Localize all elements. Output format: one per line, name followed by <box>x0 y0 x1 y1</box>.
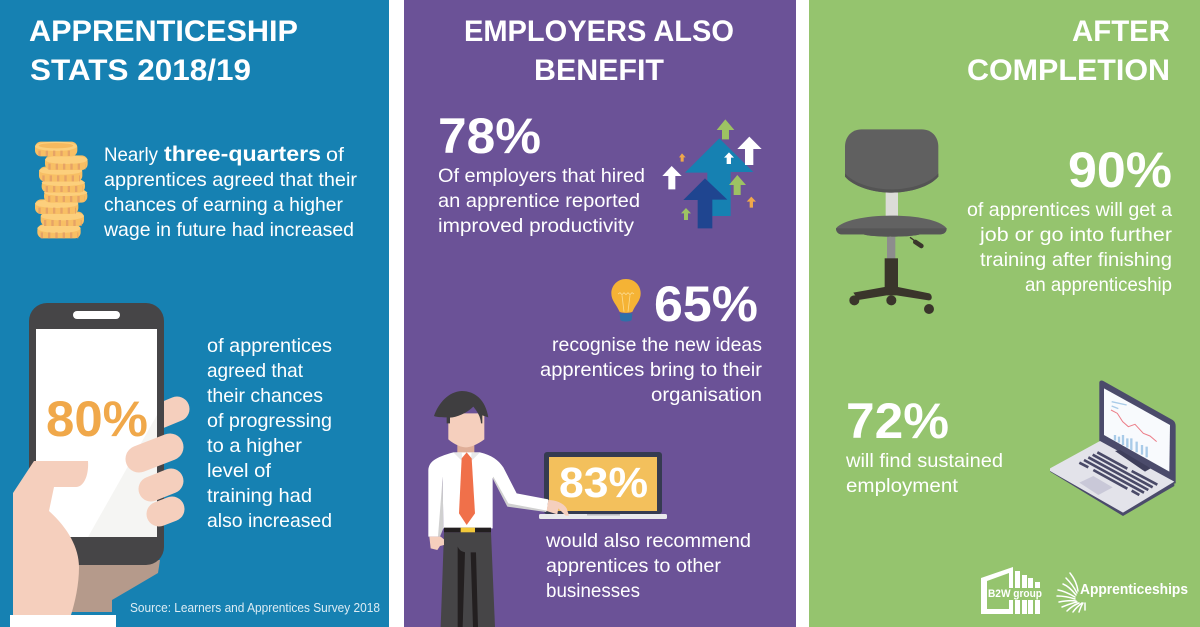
text: 72% description: employment <box>846 475 959 497</box>
text: 80% description: also increased <box>207 510 332 532</box>
text: 78% description: an apprentice reported <box>438 190 640 212</box>
heading: employers also benefit <box>464 15 734 87</box>
logo: Apprenticeships: Apprenticeships <box>1080 581 1188 598</box>
illustration: laptop showing 83% <box>539 452 667 519</box>
icon: office chair <box>836 129 947 314</box>
text: 80% description: agreed that <box>207 360 304 382</box>
icon: stack of coins <box>35 142 88 238</box>
heading: apprenticeship stats 2018/19 <box>29 15 298 87</box>
icon: rising arrows <box>662 119 762 228</box>
text: three-quarters stat: wage in future had increased <box>103 219 354 241</box>
panel: after completion <box>809 0 1200 627</box>
text: three-quarters stat <box>103 143 358 241</box>
text: 65% description: recognise the new ideas <box>552 334 762 356</box>
text: 83% description: businesses <box>546 580 640 602</box>
text: 80% description: to a higher <box>207 435 303 457</box>
text: 78% description: Of employers that hired <box>438 165 645 187</box>
stat: 90%: 90% <box>1068 142 1172 198</box>
text: 83% description: would also recommend <box>545 530 751 552</box>
text: three-quarters stat: apprentices agreed that their <box>104 169 358 191</box>
text: 80% description: their chances <box>207 385 323 407</box>
heading: after completion: AFTER <box>1072 15 1170 48</box>
text: 90% description <box>967 199 1173 296</box>
text: 90% description: training after finishing <box>980 249 1172 271</box>
text: 83% description <box>545 530 751 602</box>
text: 80% description: of apprentices <box>207 335 332 357</box>
text: 90% description: job or go into further <box>979 224 1173 246</box>
text: three-quarters stat: of <box>326 144 345 166</box>
text: three-quarters stat: Nearly <box>104 144 158 166</box>
text: 90% description: of apprentices will get a <box>967 199 1172 221</box>
heading: after completion: COMPLETION <box>967 54 1170 87</box>
text: three-quarters stat: three-quarters <box>164 143 321 166</box>
text: 65% description: apprentices bring to their <box>540 359 763 381</box>
heading: apprenticeship stats 2018/19: STATS 2018/19 <box>30 54 251 87</box>
text: three-quarters stat: chances of earning a higher <box>104 194 343 216</box>
panel: apprenticeship stats <box>0 0 389 627</box>
icon: laptop with chart <box>1050 381 1176 516</box>
text: 80% description <box>207 335 332 532</box>
text: 65% description: organisation <box>651 384 762 406</box>
text: 83% description: apprentices to other <box>546 555 722 577</box>
text: 80% description: level of <box>207 460 272 482</box>
heading: employers also benefit: BENEFIT <box>534 54 664 87</box>
text: 65% description <box>540 334 763 406</box>
heading: employers also benefit: EMPLOYERS ALSO <box>464 15 734 48</box>
stat: 72%: 72% <box>846 393 949 449</box>
text: 90% description: an apprenticeship <box>1025 274 1172 296</box>
logo: Apprenticeships <box>1057 573 1188 612</box>
text: 78% description: improved productivity <box>438 215 634 237</box>
stat: 65%: 65% <box>654 276 758 332</box>
text: 78% description <box>438 165 645 237</box>
logo: B2W group: B2W group <box>988 588 1042 600</box>
stat: 78%: 78% <box>438 108 541 164</box>
illustration: businessman <box>428 391 569 627</box>
heading: after completion <box>967 15 1170 87</box>
heading: apprenticeship stats 2018/19: APPRENTICESHIP <box>29 15 298 48</box>
stat: 83%: 83% <box>559 459 648 507</box>
text: 72% description <box>845 450 1003 497</box>
icon: hand holding phone showing 80% <box>10 303 177 627</box>
panel: employers also benefit <box>404 0 796 627</box>
logo: B2W group <box>981 567 1042 614</box>
text: 80% description: training had <box>207 485 312 507</box>
icon: light bulb <box>611 279 641 321</box>
text: 80% description: of progressing <box>207 410 332 432</box>
source note: Source: Learners and Apprentices Survey 2018 <box>130 601 380 615</box>
stat: 80%: 80% <box>46 391 148 447</box>
text: 72% description: will find sustained <box>845 450 1003 472</box>
